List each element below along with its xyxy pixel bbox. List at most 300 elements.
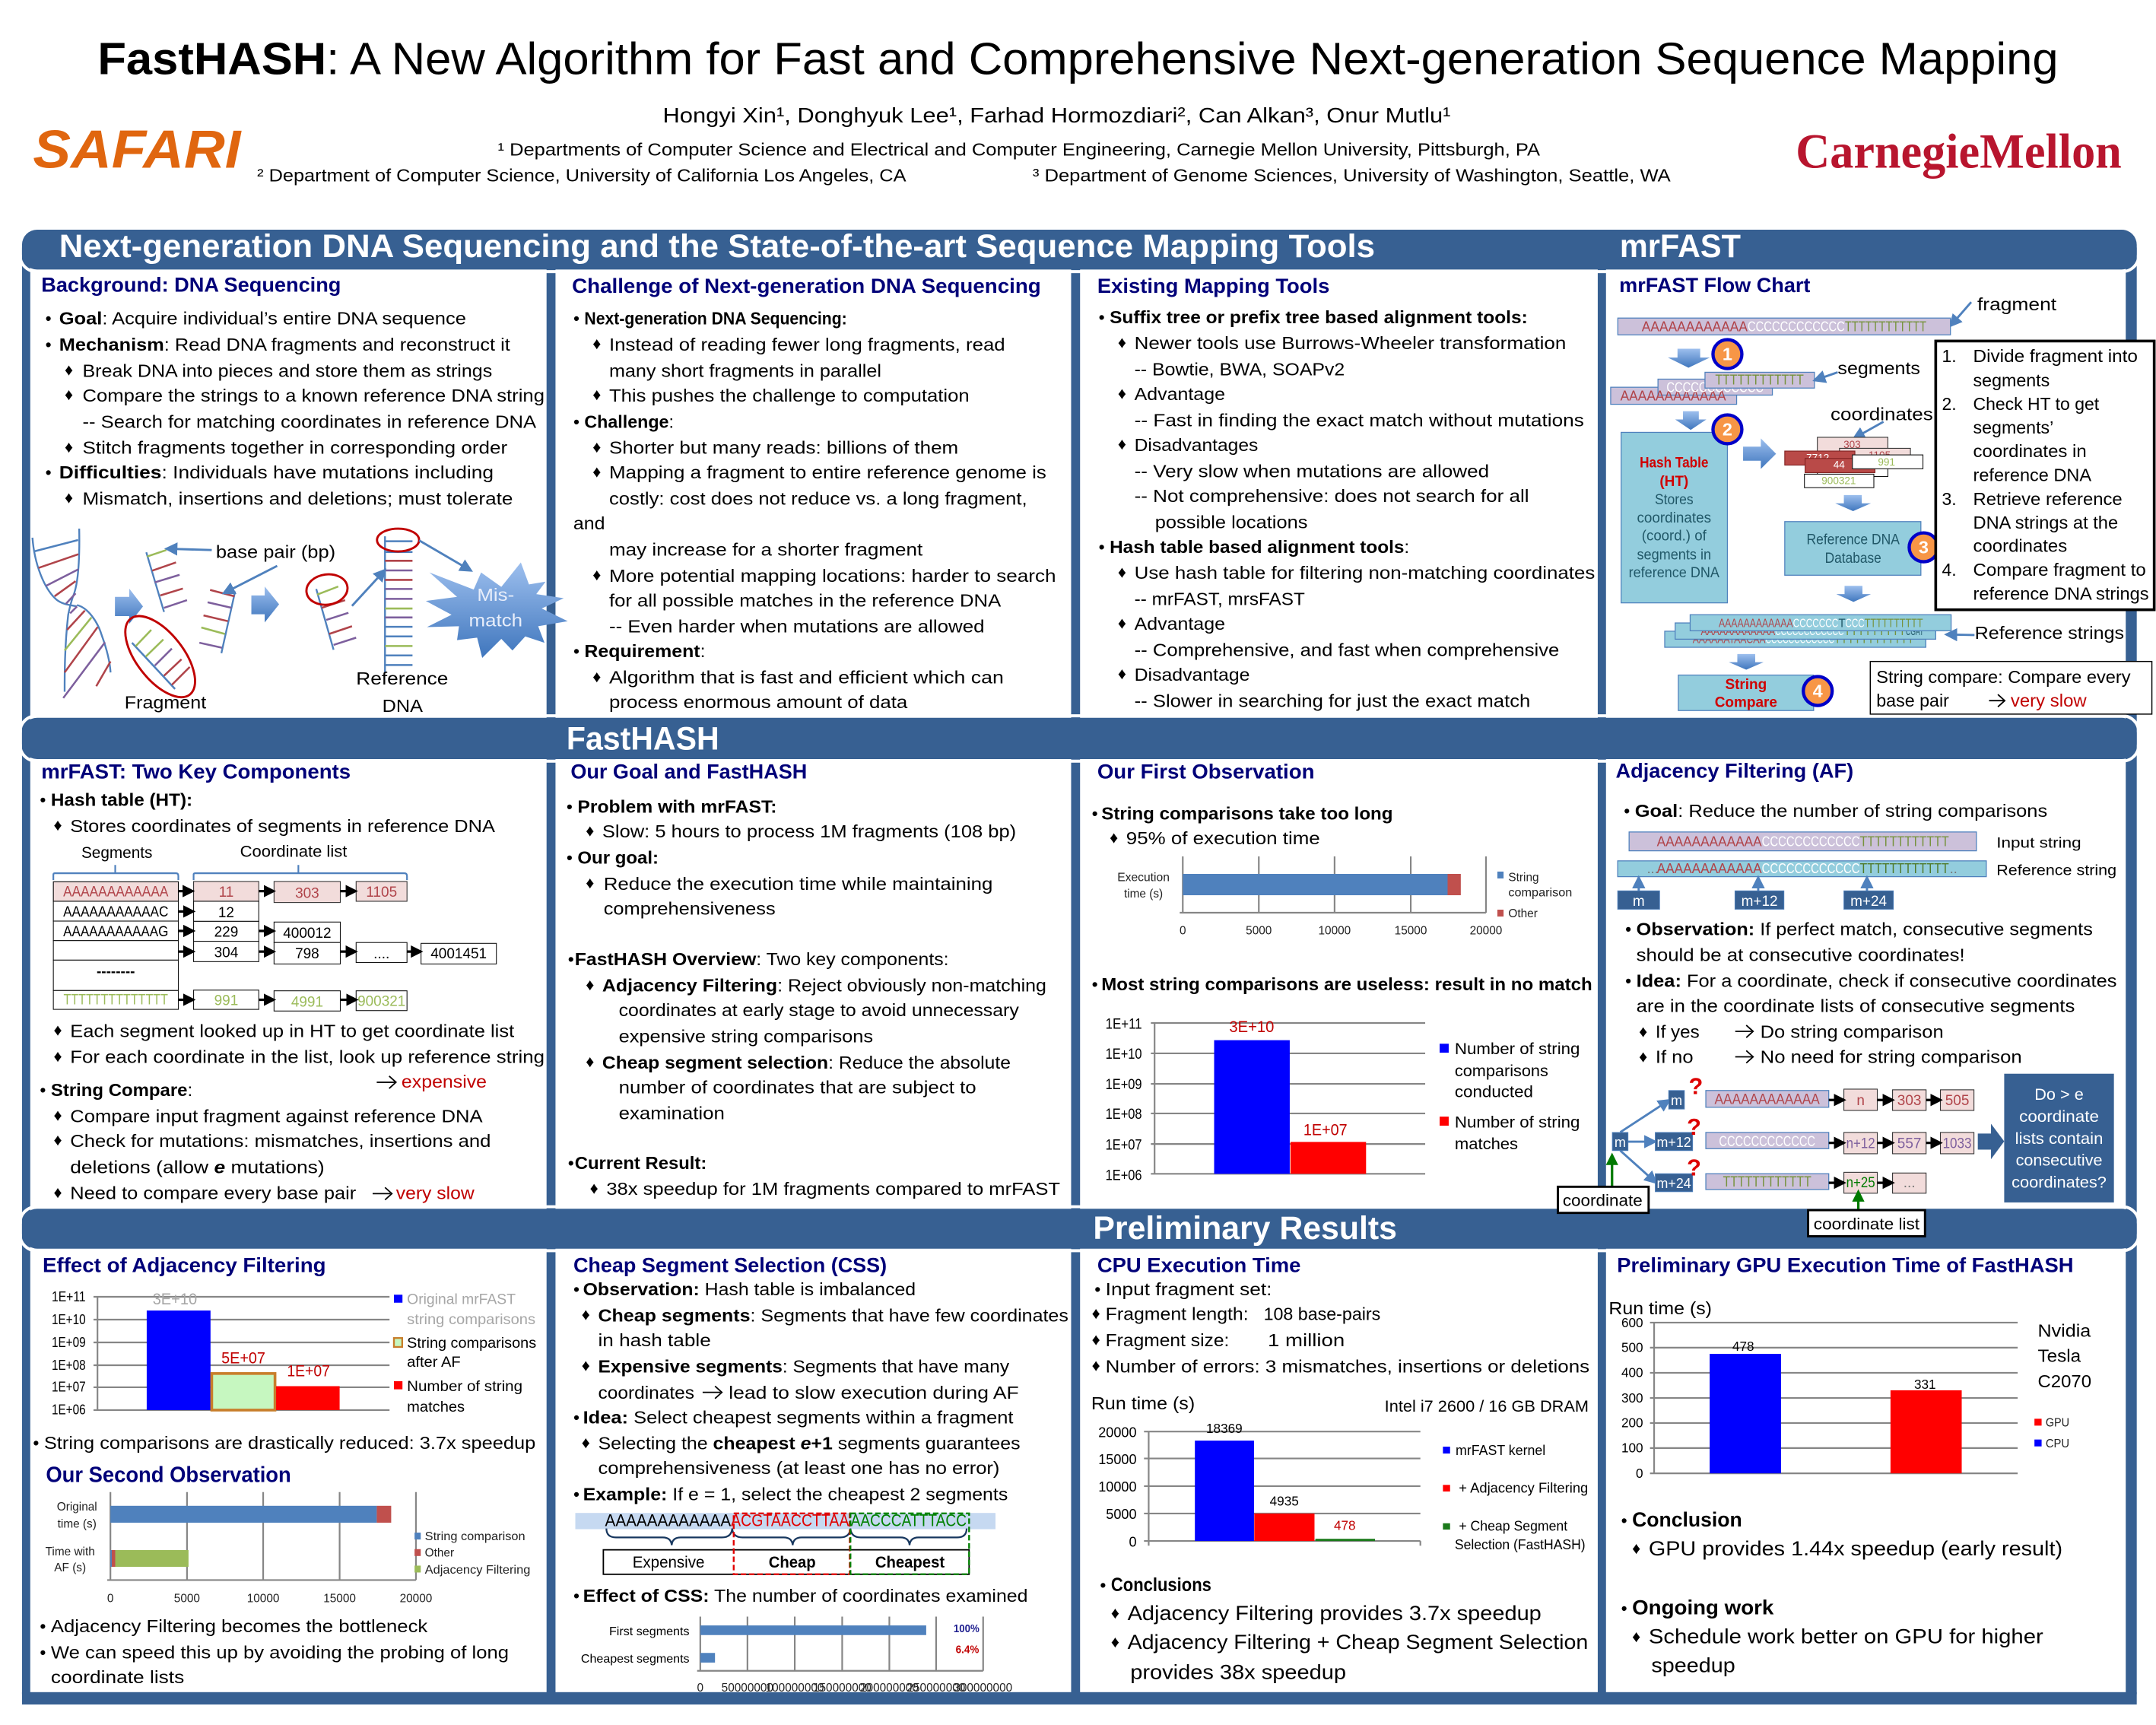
text block: • — [573, 411, 579, 431]
bar chart: GPU run time: 100 — [1621, 1441, 1643, 1456]
text block: Example: If e = 1, select the cheapest 2 segments — [583, 1485, 1008, 1504]
panel: CPU Execution Time — [1091, 1253, 1589, 1684]
heading: Existing Mapping Tools — [1097, 274, 1329, 297]
bar chart: CPU run time: 18369 — [1206, 1421, 1243, 1436]
reference string bars: TTTTTTTTT — [1844, 625, 1907, 638]
text: most comparisons useless: • — [1092, 974, 1098, 994]
text block: Shorter but many reads: billions of them — [609, 438, 958, 458]
diagram: hash table: 303 — [295, 886, 319, 902]
diagram: input and reference strings — [1618, 832, 2116, 910]
arrow — [1729, 654, 1764, 670]
text block: may increase for a shorter fragment — [609, 539, 923, 559]
segment bars: TTTTTTTTTTTT — [1715, 373, 1804, 388]
text block: Check for mutations: mismatches, insertions and — [70, 1131, 491, 1151]
bar chart: execution time: 15000 — [1395, 924, 1427, 937]
text block: coordinates at early stage to avoid unnecessary — [619, 1000, 1019, 1020]
heading: section 1: mrFAST — [1620, 229, 1741, 265]
box: hash table: coordinates — [1637, 510, 1711, 526]
text block: Number of errors: 3 mismatches, insertions or deletions — [1106, 1356, 1589, 1376]
logo: SAFARI: SAFARI — [33, 119, 242, 179]
title: FastHASH : A New Algorithm for Fast and Comprehensive Next-generation Sequence Mapping — [97, 33, 2059, 84]
text block: -- Fast in finding the exact match without mutations — [1135, 410, 1584, 430]
text block: • — [1625, 919, 1631, 939]
text block: ♦ — [65, 385, 73, 404]
callout: mismatch star — [426, 562, 568, 658]
text block: No need for string comparison — [1761, 1047, 2022, 1067]
icon: fragment to align — [304, 572, 356, 650]
bar chart: CPU run time: 0 — [1129, 1534, 1137, 1549]
reference string bars — [1665, 615, 1951, 647]
text block: We can speed this up by avoiding the probing of long — [51, 1642, 509, 1662]
text block: String Compare : — [51, 1080, 192, 1100]
bar chart: string comparisons vs matches: 1E+07 — [1303, 1120, 1348, 1139]
text block — [567, 797, 1060, 1199]
text block: -- mrFAST, mrsFAST — [1135, 589, 1305, 609]
text block: String comparisons take too long — [1101, 804, 1393, 824]
panel: Effect of Adjacency Filtering — [33, 1253, 536, 1687]
diagram: hash table: Segments — [81, 844, 152, 862]
bar chart: execution time: comparison — [1508, 886, 1572, 899]
text block: • — [568, 1153, 574, 1173]
diagram: hash table: 400012 — [283, 926, 332, 942]
diagram: adjacency check: consecutive — [2016, 1151, 2102, 1170]
text block: expensive — [402, 1072, 487, 1091]
text block: ♦ — [586, 1052, 594, 1071]
callout: numbered steps: Retrieve reference — [1973, 489, 2123, 509]
bar chart: execution time: 5000 — [1246, 924, 1272, 937]
text block: costly: cost does not reduce vs. a long fragment, — [609, 489, 1027, 509]
icon: step 3: 3 — [1919, 538, 1929, 558]
text block: Requirement : — [584, 641, 706, 661]
bar chart: second observation: String comparison — [425, 1530, 526, 1543]
text block: Goal : Acquire individual’s entire DNA sequence — [59, 309, 466, 329]
text block: ♦ — [54, 1130, 62, 1149]
text block: Newer tools use Burrows-Wheeler transformation — [1135, 333, 1566, 353]
text block: ♦ — [1118, 434, 1126, 453]
text block: Difficulties : Individuals have mutations including — [59, 462, 494, 482]
bar chart: second observation: Other — [425, 1547, 454, 1560]
reference string bars: CCCCCCC — [1793, 617, 1838, 630]
diagram: adjacency check: ... — [1904, 1175, 1916, 1191]
heading: mrFAST Flow Chart — [1619, 273, 1810, 297]
reference string bars: TTTTTTTTTT — [1865, 617, 1923, 630]
text block: conclusions: Adjacency Filtering provides 3.7x speedup — [1128, 1601, 1542, 1625]
bar chart: effect of AF: String comparisons — [407, 1336, 536, 1352]
diagram: adjacency check — [1612, 1073, 2114, 1202]
text block: Problem with mrFAST: — [577, 797, 777, 817]
arrow — [1743, 438, 1776, 469]
panel: mrFAST Two Key Components — [40, 759, 545, 1203]
text block: Instead of reading fewer long fragments, read — [609, 335, 1005, 354]
bar chart: coordinates examined: 0 — [697, 1682, 703, 1695]
diagram: hash table: Coordinate list — [240, 843, 348, 860]
bar chart: CPU run time: Intel i7 2600 / 16 GB DRAM — [1385, 1396, 1589, 1415]
fragment bar: TTTTTTTTTTTT — [1845, 319, 1926, 335]
text block: ♦ — [582, 1433, 590, 1452]
text block: ♦ — [1092, 1329, 1100, 1349]
bar chart: GPU run time: 200 — [1621, 1415, 1643, 1431]
callout: coordinate list: coordinate list — [1814, 1215, 1919, 1233]
text block: lead to slow execution during AF — [729, 1383, 1019, 1403]
text block: Adjacency Filtering becomes the bottleneck — [51, 1616, 428, 1636]
diagram: adjacency check: ? — [1687, 1155, 1701, 1181]
diagram: adjacency check: 557 — [1897, 1136, 1921, 1152]
bar chart: GPU run time: CPU — [2046, 1438, 2069, 1450]
diagram: adjacency check: AAAAAAAAAAAA — [1715, 1091, 1820, 1107]
segment bars: AAAAAAAAAAAA — [1621, 388, 1727, 403]
box: hash table: reference DNA — [1629, 565, 1719, 581]
text block: Current Result: — [575, 1153, 706, 1173]
panel: Adjacency Filtering — [1612, 758, 2116, 1202]
coordinate boxes: 7712 — [1806, 453, 1829, 464]
box: hash table: Hash Table — [1640, 456, 1708, 472]
text block: Fragment size: — [1106, 1330, 1229, 1350]
diagram: input and reference strings: Reference string — [1996, 863, 2116, 879]
text block: ♦ — [590, 1178, 599, 1197]
bar chart: CPU run time: 478 — [1334, 1518, 1356, 1533]
bar chart: CPU run time: mrFAST kernel — [1456, 1443, 1545, 1458]
text block: ♦ — [1118, 664, 1126, 683]
bar chart: GPU run time: 600 — [1621, 1315, 1643, 1330]
diagram: segment example: AAAAAAAAAAAA — [605, 1511, 732, 1530]
bar chart: effect of AF: 1E+11 — [52, 1289, 86, 1304]
callout: coordinate: coordinate — [1563, 1193, 1643, 1210]
icon: reference DNA — [377, 529, 419, 672]
text block: Disadvantages — [1135, 435, 1258, 455]
diagram: hash table: 4001451 — [430, 946, 487, 962]
segment bars: CCCCCCCCCCCC — [1666, 380, 1764, 395]
text block: Each segment looked up in HT to get coordinate list — [70, 1021, 515, 1040]
text block: Stores coordinates of segments in reference DNA — [70, 816, 496, 836]
box: reference DNA database — [1785, 522, 1921, 575]
bar chart: second observation: Adjacency Filtering — [425, 1564, 530, 1577]
bar chart: effect of AF: Original mrFAST — [407, 1291, 516, 1307]
text block: ♦ — [1092, 1356, 1100, 1375]
text: effect of CSS: Effect of CSS: The number of coordinates examined — [583, 1586, 1028, 1606]
bar chart: second observation: 15000 — [323, 1592, 356, 1605]
coordinate boxes: 44 — [1834, 459, 1845, 471]
text block: • — [567, 847, 573, 867]
bar chart: effect of AF: 1E+07 — [287, 1361, 330, 1380]
bar chart: string comparisons vs matches: 1E+07 — [1106, 1138, 1142, 1154]
bar chart: CPU run time: 15000 — [1098, 1452, 1137, 1467]
arrow — [252, 586, 279, 622]
callout: numbered steps: reference DNA strings — [1973, 584, 2149, 604]
text block: Need to compare every base pair — [70, 1183, 357, 1203]
text block: ♦ — [1639, 1021, 1647, 1040]
callout: numbered steps: segments’ — [1973, 418, 2053, 437]
text block: Observation: Hash table is imbalanced — [583, 1279, 916, 1299]
text block: Compare input fragment against reference DNA — [70, 1106, 483, 1126]
panel: Our Goal and FastHASH — [567, 759, 1060, 1199]
diagram: segment example — [575, 1511, 995, 1574]
arrow — [1668, 349, 1710, 367]
text block: Observation: If perfect match, consecutive segments — [1637, 919, 2093, 939]
callout: numbered steps: 3. — [1942, 489, 1957, 509]
bar chart: string comparisons vs matches: 3E+10 — [1229, 1017, 1274, 1036]
icon: step 4: 4 — [1813, 681, 1823, 701]
bar chart: effect of AF — [52, 1289, 536, 1418]
diagram: adjacency check: ? — [1688, 1073, 1703, 1100]
text block: comprehensiveness — [604, 898, 776, 918]
text block: ♦ — [586, 873, 594, 892]
text block: For each coordinate in the list, look up reference string — [70, 1047, 545, 1067]
diagram: hash table: 991 — [214, 993, 238, 1009]
fragment bar: CCCCCCCCCCCC — [1748, 319, 1845, 335]
text block: • — [573, 1485, 579, 1504]
text block: conclusions: ♦ — [1111, 1603, 1119, 1622]
bar chart: second observation: Original — [57, 1501, 97, 1514]
bar chart: effect of AF: 1E+10 — [52, 1312, 86, 1327]
diagram: hash table: AAAAAAAAAAAA — [63, 885, 169, 901]
icon: step 1: 1 — [1723, 345, 1732, 364]
text: speedup: String comparisons are drastically reduced: 3.7x speedup — [44, 1433, 535, 1453]
text block: and — [573, 513, 605, 533]
text block: ♦ — [1092, 1304, 1100, 1323]
text block: Break DNA into pieces and store them as strings — [82, 361, 492, 380]
diagram: adjacency check: TTTTTTTTTTTT — [1723, 1174, 1811, 1190]
reference string bars: CCCCCCCCCCCC — [1775, 625, 1844, 638]
text block: Adjacency Filtering : Reject obviously non-matching — [602, 976, 1046, 996]
icon: fragment middle — [199, 590, 235, 653]
callout: numbered steps: 2. — [1942, 394, 1957, 414]
text block: Input fragment set: — [1106, 1279, 1272, 1299]
text block: Selecting the cheapest e+1 segments guarantees — [598, 1434, 1021, 1453]
text block: Cheap segments : Segments that have few coordinates — [598, 1306, 1068, 1326]
text block: • — [46, 335, 52, 354]
text block: conclusion: ♦ — [1632, 1539, 1640, 1558]
bar chart: execution time: 10000 — [1319, 924, 1351, 937]
text block: Do string comparison — [1761, 1021, 1944, 1041]
arrow — [1854, 422, 1884, 438]
callout: coordinate list — [1808, 1192, 1925, 1236]
arrow — [1951, 302, 1971, 326]
icon: step 1 — [1713, 340, 1742, 369]
bar chart: GPU run time: 0 — [1636, 1466, 1643, 1481]
coordinate boxes: 1105 — [1869, 450, 1891, 461]
segment bars — [1611, 372, 1815, 405]
affiliations: ² Department of Computer Science, University of California Los Angeles, CA — [257, 166, 907, 186]
text block — [46, 309, 545, 509]
text block: ♦ — [54, 815, 62, 834]
text block: very slow — [396, 1183, 475, 1203]
bar chart: effect of AF: 1E+06 — [52, 1403, 86, 1418]
icon: step 2 — [1713, 415, 1742, 443]
box: string compare — [1678, 675, 1814, 710]
bar chart: second observation: 0 — [107, 1592, 113, 1605]
text block: Hash table (HT): — [51, 790, 192, 810]
text block: -- Even harder when mutations are allowed — [609, 617, 985, 637]
diagram: input and reference strings: CCCCCCCCCCCC — [1762, 834, 1860, 850]
text block: deletions (allow e mutations) — [70, 1157, 325, 1177]
icon: step 4 — [1803, 677, 1832, 706]
logo: Carnegie Mellon: CarnegieMellon — [1796, 125, 2122, 179]
text block: ♦ — [1118, 332, 1126, 351]
text block: • — [1094, 1279, 1100, 1299]
panel: Our First Observation — [1092, 759, 1592, 1183]
heading: Adjacency Filtering (AF) — [1615, 758, 1853, 782]
diagram: adjacency check: CCCCCCCCCCCC — [1719, 1134, 1815, 1150]
text block: ongoing work — [1621, 1596, 2043, 1677]
text block: 95% of execution time — [1126, 828, 1320, 848]
diagram: input and reference strings: m — [1633, 894, 1645, 910]
bar chart: string comparisons vs matches: 1E+06 — [1106, 1167, 1142, 1183]
text block: -- Not comprehensive: does not search for all — [1135, 486, 1529, 506]
reference string bars: TTTTTTTTTTTT — [1834, 633, 1914, 646]
bar chart: coordinates examined: First segments — [609, 1625, 690, 1638]
text block: conclusions: provides 38x speedup — [1130, 1660, 1346, 1684]
bar chart: execution time: time (s) — [1124, 888, 1163, 901]
diagram: hash table: 4991 — [291, 994, 323, 1010]
bar chart: effect of AF: 1E+07 — [52, 1380, 86, 1395]
text block: • — [40, 1080, 46, 1100]
diagram: hash table: TTTTTTTTTTTTTT — [64, 993, 168, 1009]
text: speedup: • — [33, 1433, 39, 1453]
heading: Cheap Segment Selection (CSS) — [573, 1253, 887, 1276]
text block — [573, 309, 1056, 712]
icon: step 3 — [1909, 533, 1938, 562]
text block: • — [40, 790, 46, 810]
heading: Challenge of Next-generation DNA Sequencing — [572, 274, 1041, 297]
bar chart: second observation: AF (s) — [54, 1561, 86, 1574]
text block: ♦ — [54, 1106, 62, 1125]
label: reference DNA: DNA — [383, 696, 424, 716]
diagram: adjacency check: m+24 — [1657, 1176, 1691, 1191]
text block: conclusion: GPU provides 1.44x speedup (early result) — [1649, 1536, 2062, 1560]
text block: Cheap segment selection : Reduce the absolute — [602, 1053, 1011, 1072]
bar chart: coordinates examined: 150000000 — [813, 1682, 872, 1695]
text block: Next-generation DNA Sequencing: — [584, 309, 847, 329]
text block: -- Slower in searching for just the exact match — [1135, 691, 1530, 710]
diagram: hash table: .... — [373, 946, 389, 962]
text block: number of coordinates that are subject to — [619, 1077, 976, 1097]
text block: Disadvantage — [1135, 665, 1250, 685]
box: hash table: (HT) — [1659, 474, 1688, 490]
bar chart: GPU run time: 331 — [1914, 1377, 1936, 1392]
text block: -- Very slow when mutations are allowed — [1135, 461, 1489, 481]
diagram: input and reference strings: AAAAAAAAAAAA — [1657, 861, 1763, 876]
coordinate boxes: 900321 — [1821, 475, 1856, 486]
text block: • — [573, 309, 579, 329]
bar chart: string comparisons vs matches: 1E+09 — [1106, 1077, 1142, 1093]
text block: • — [1092, 804, 1098, 824]
diagram: hash table: 11 — [219, 885, 233, 901]
text: most comparisons useless: Most string comparisons are useless: result in no match — [1101, 974, 1592, 994]
bar chart: coordinates examined: 50000000 — [722, 1682, 773, 1695]
label: reference DNA: Reference — [356, 669, 448, 688]
text block: Algorithm that is fast and efficient which can — [609, 668, 1004, 688]
bar chart: execution time: Execution — [1117, 871, 1170, 884]
diagram: input and reference strings: m+12 — [1742, 894, 1778, 910]
callout: numbered steps: 1. — [1942, 346, 1957, 366]
text block: If yes — [1656, 1021, 1700, 1041]
text block: ongoing work: speedup — [1651, 1654, 1735, 1677]
diagram: adjacency check: m — [1671, 1093, 1682, 1108]
icon: fragment upper — [146, 550, 187, 612]
bar chart: GPU run time: 500 — [1621, 1340, 1643, 1355]
bar chart: string comparisons vs matches: matches — [1455, 1136, 1518, 1153]
text block — [1099, 307, 1595, 710]
bar chart: CPU run time: 4935 — [1270, 1493, 1299, 1508]
bar chart: coordinates examined: 100% — [954, 1623, 980, 1635]
text block: ♦ — [1118, 613, 1126, 632]
text block — [573, 1279, 1068, 1504]
text block: comprehensiveness (at least one has no error) — [598, 1458, 999, 1478]
text block: Fragment length: — [1106, 1304, 1249, 1324]
text block: Idea: Select cheapest segments within a fragment — [583, 1407, 1014, 1427]
diagram: adjacency check: n+25 — [1846, 1175, 1875, 1191]
bar chart: execution time: Other — [1508, 907, 1538, 920]
diagram: segment example: ACGTAACCTTAA — [731, 1511, 849, 1530]
bar chart: effect of AF: after AF — [407, 1355, 461, 1371]
text block: ♦ — [592, 667, 601, 686]
diagram: segment example: Expensive — [633, 1552, 704, 1571]
bar chart: string comparisons vs matches: 1E+08 — [1106, 1107, 1142, 1123]
text block: Stitch fragments together in corresponding order — [82, 438, 508, 458]
diagram: segment example: AACCCATTTACC — [851, 1511, 967, 1530]
bar chart: execution time — [1117, 856, 1572, 937]
label: segments: segments — [1837, 358, 1920, 378]
diagram: hash table: 12 — [218, 905, 234, 921]
text block: are in the coordinate lists of consecutive segments — [1637, 996, 2075, 1016]
text block: 38x speedup for 1M fragments compared to mrFAST — [606, 1179, 1060, 1199]
text block: many short fragments in parallel — [609, 361, 881, 380]
label: base pair: base pair (bp) — [216, 542, 335, 561]
callout arrows — [167, 541, 471, 606]
diagram: adjacency check: 1033 — [1943, 1136, 1972, 1152]
text block: ongoing work: Ongoing work — [1632, 1596, 1774, 1619]
bar chart: string comparisons vs matches: 1E+10 — [1106, 1047, 1142, 1063]
text block: ♦ — [65, 437, 73, 456]
diagram: hash table: 229 — [214, 924, 238, 940]
bar chart: string comparisons vs matches: Number of string — [1455, 1113, 1580, 1131]
reference string bars: AAAAAATAACAA — [1693, 633, 1766, 646]
text block — [1092, 1279, 1589, 1376]
text block: ♦ — [54, 1183, 62, 1202]
bar chart: string comparisons vs matches: conducted — [1455, 1083, 1533, 1101]
diagram: input and reference strings: TTTTTTTTTTTT — [1860, 834, 1949, 850]
bar chart: effect of AF: 1E+08 — [52, 1358, 86, 1373]
diagram: input and reference strings: m+24 — [1850, 894, 1887, 910]
bar chart: CPU run time — [1091, 1393, 1589, 1552]
reference string bars: CCC — [1845, 617, 1865, 630]
text block: ♦ — [1118, 562, 1126, 581]
text block: Reduce the execution time while maintaining — [604, 874, 992, 894]
text block: ♦ — [65, 361, 73, 380]
arrow — [1946, 634, 1974, 636]
bar chart: coordinates examined: 6.4% — [956, 1644, 979, 1656]
icon: DNA helix — [33, 529, 110, 698]
text block: • — [567, 797, 573, 817]
text block: Suffix tree or prefix tree based alignment tools: — [1110, 307, 1528, 327]
label: coordinates: coordinates — [1831, 405, 1933, 424]
text block: ♦ — [54, 1047, 62, 1066]
text block — [1092, 804, 1393, 848]
bar chart: GPU run time: 300 — [1621, 1390, 1643, 1406]
box: string compare: Compare — [1715, 694, 1777, 710]
text block: coordinates — [598, 1383, 694, 1403]
text block: -- Search for matching coordinates in reference DNA — [82, 411, 537, 431]
coordinate boxes: 303 — [1843, 439, 1861, 450]
box: hash table — [1621, 432, 1727, 603]
arrow — [1675, 411, 1707, 430]
diagram: input and reference strings: CCCCCCCCCCCC — [1762, 861, 1860, 876]
diagram: adjacency check: Do > e — [2034, 1085, 2084, 1104]
text block: Idea: For a coordinate, check if consecutive coordinates — [1637, 971, 2116, 990]
text block: ♦ — [1639, 1047, 1647, 1066]
callout: numbered steps — [1935, 341, 2154, 610]
text block: Mechanism : Read DNA fragments and reconstruct it — [59, 335, 510, 354]
